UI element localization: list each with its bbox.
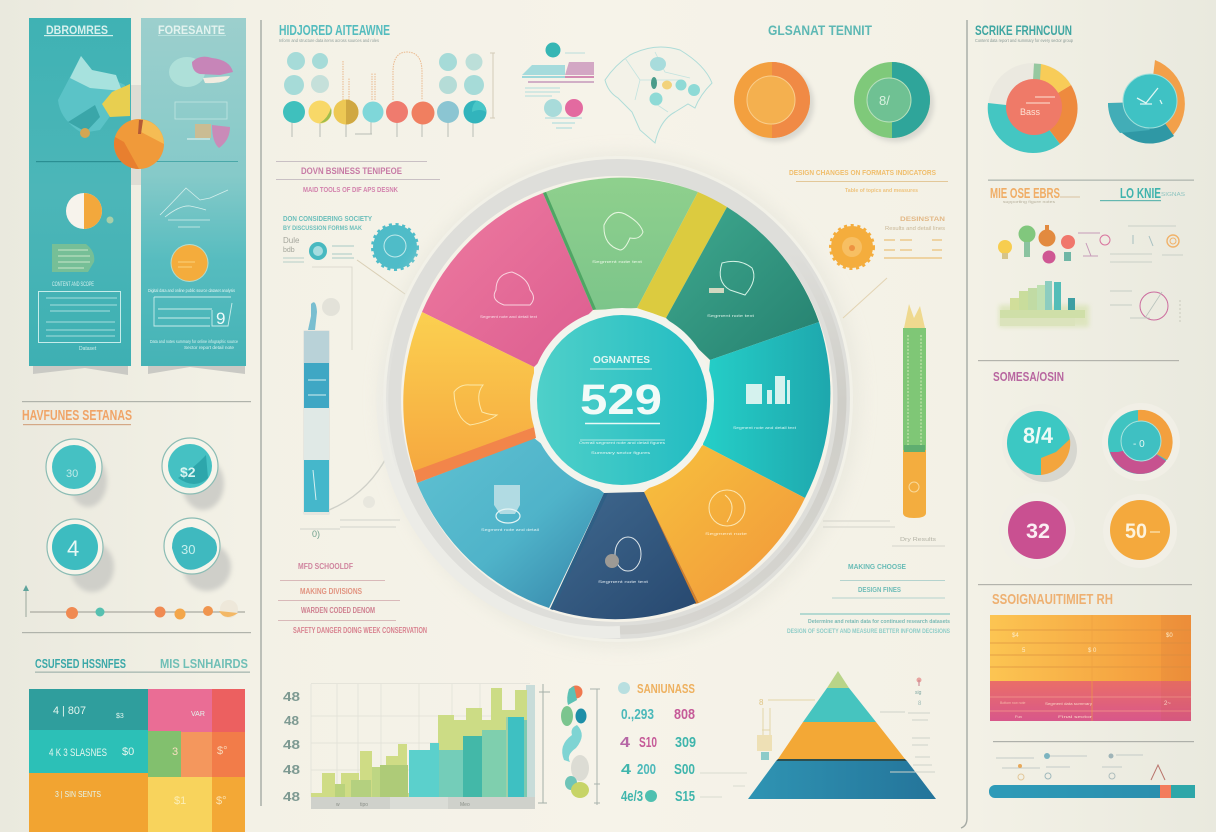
wheel: yellow segment xyxy=(403,312,536,483)
stat circle 3 xyxy=(47,519,114,592)
row 3 xyxy=(621,761,695,778)
section: top circle grid xyxy=(279,22,495,137)
stat circle 4: 30 xyxy=(181,542,195,557)
heading left: CSUFSED HSSNFES xyxy=(35,656,126,671)
cell labels xyxy=(49,705,228,807)
metric circle 2 xyxy=(1102,403,1180,481)
metric circle 3: 32 xyxy=(1026,520,1050,543)
row 4: 4e/3 xyxy=(621,788,643,805)
caption: Digital data and online public source dataset analysis xyxy=(148,288,235,294)
icon: header dot xyxy=(618,682,630,694)
pink heart shape xyxy=(187,124,230,148)
donut chart 1 xyxy=(988,63,1078,153)
heading: HAVFUNES SETANAS xyxy=(22,407,132,424)
cell labels: $0 xyxy=(122,746,134,758)
teal bars xyxy=(409,750,439,797)
y axis labels: 48 xyxy=(283,789,300,804)
metric circle 1: 8/4 xyxy=(1023,423,1054,448)
panel: left teal poster xyxy=(29,18,131,375)
chart: bar chart: tipo xyxy=(360,802,368,808)
bottom-right notes xyxy=(787,564,950,635)
segment icon xyxy=(720,261,754,295)
left annotation xyxy=(757,698,815,760)
panel: right wheel annotations: Results and detail lines xyxy=(885,226,946,232)
segment caption: Segment note and detail text xyxy=(733,425,797,430)
green circle xyxy=(854,62,934,142)
cell labels: VAR xyxy=(191,711,205,718)
heading right: MIS LSNHAIRDS xyxy=(160,656,248,671)
row 2 xyxy=(620,734,696,751)
segment caption: Segment note text xyxy=(598,579,649,584)
line chart xyxy=(160,188,228,227)
icon: world map xyxy=(605,47,712,143)
bottom-right notes: DESIGN FINES xyxy=(858,587,901,594)
row 1: 808 xyxy=(674,706,695,723)
chart: pencil gauge xyxy=(903,304,926,518)
timeline xyxy=(23,585,245,620)
bottom-left notes: SAFETY DANGER DOING WEEK CONSERVATION xyxy=(293,626,427,635)
segment caption: Segment note and detail xyxy=(481,527,539,532)
wheel: green segment xyxy=(543,178,698,310)
orange circle xyxy=(734,62,814,142)
orange headline: DESIGN CHANGES ON FORMATS INDICATORS xyxy=(789,170,936,177)
outlined text box xyxy=(175,102,227,119)
y axis labels: 48 xyxy=(284,713,299,728)
notes below wheel right xyxy=(823,521,895,527)
cell labels: 3 | SIN SENTS xyxy=(55,790,101,799)
icon: orange gear xyxy=(831,226,873,268)
segment icon xyxy=(604,212,643,250)
row notes xyxy=(1000,633,1173,719)
chart: vertical pillar gauge xyxy=(300,298,400,539)
row 2: 4 xyxy=(620,734,631,751)
row 1: 0.,293 xyxy=(621,706,654,723)
wheel outer ring xyxy=(380,152,860,648)
section: progress bar xyxy=(989,741,1195,798)
green note block xyxy=(52,244,94,272)
heading: HIDJORED AITEAWNE xyxy=(279,22,390,39)
column dividers xyxy=(261,20,967,828)
panel: left wheel annotations: bdb xyxy=(283,247,295,254)
panel: left wheel annotations: Dule xyxy=(283,236,300,245)
bulb icons xyxy=(998,225,1075,264)
subheading: Content data report and summary for every sector group xyxy=(975,38,1073,43)
centre value: 529 xyxy=(580,376,662,424)
segment caption: Segment note xyxy=(705,531,748,536)
heading: SOMESA/OSIN xyxy=(993,369,1064,384)
y axis labels: 48 xyxy=(283,689,300,704)
centre label: OGNANTES xyxy=(593,355,650,366)
grid xyxy=(311,684,530,797)
segment icon xyxy=(454,385,497,425)
faceted globe illustration xyxy=(58,56,130,138)
metric circle 3 xyxy=(999,493,1075,569)
note caption: CONTENT AND SCOPE xyxy=(52,282,94,288)
chart: bar chart: Meo xyxy=(460,802,470,808)
panel: right wheel annotations xyxy=(789,170,948,546)
stat circle 2: $2 xyxy=(180,464,196,480)
orange heading: MIE OSE EBRS xyxy=(990,185,1060,202)
row notes: Bottom row note xyxy=(1000,701,1026,705)
row 2: S10 xyxy=(639,734,657,751)
wheel centre: Summary sector figures xyxy=(591,450,650,455)
chart: vertical pillar gauge: 0) xyxy=(312,529,320,539)
bottom-right notes: Determine and retain data for continued research datasets xyxy=(808,619,950,625)
small teal circle xyxy=(309,242,327,260)
chart: bar chart xyxy=(283,684,535,809)
cell labels: $° xyxy=(217,745,228,757)
bottom-right notes: DESIGN OF SOCIETY AND MEASURE BETTER INFORM DECISIONS xyxy=(787,629,950,635)
stat circle 3: 4 xyxy=(67,536,79,561)
section: bulbs and bars: SIGNAS xyxy=(1161,192,1186,198)
brain illustration xyxy=(169,57,233,87)
metric circle 1 xyxy=(1002,404,1082,484)
segment caption: Segment note text xyxy=(592,259,643,264)
row 4 xyxy=(621,788,695,805)
wheel: teal segment xyxy=(703,322,830,498)
donut chart 1: Bass xyxy=(1020,107,1041,117)
wheel: pink segment xyxy=(422,193,593,367)
small curl icons xyxy=(1078,226,1183,262)
segment icon: buildings xyxy=(746,376,790,404)
segment caption: Segment note text xyxy=(707,313,755,318)
cell labels: 4 K 3 SLASNES xyxy=(49,747,107,759)
panel: right wheel annotations: Dry Results xyxy=(900,537,936,543)
wheel: navy segment xyxy=(551,492,696,619)
poster footer: Dataset xyxy=(79,346,97,352)
orange coin xyxy=(170,244,208,282)
stat circle 1: 30 xyxy=(66,468,78,480)
wheel: orange segment xyxy=(640,445,805,604)
row notes: $0 xyxy=(1166,633,1173,639)
metric circle 4 xyxy=(1103,494,1177,568)
stat circle 2 xyxy=(162,438,224,510)
top rows xyxy=(284,52,484,95)
segment icon xyxy=(494,485,520,514)
stat circle 4 xyxy=(164,518,231,591)
right annotations: 8 xyxy=(918,701,922,707)
row notes: Final sector xyxy=(1058,714,1093,719)
circular diagram xyxy=(1110,291,1180,322)
y axis labels: 48 xyxy=(283,737,300,752)
cell labels: 3 xyxy=(172,746,178,758)
bar chart with shadow base xyxy=(999,281,1089,327)
donut chart 2 xyxy=(1108,60,1185,144)
cell labels: $1 xyxy=(174,795,186,807)
pins xyxy=(292,120,473,137)
section: treemap xyxy=(29,656,250,832)
wheel: yellow stripe xyxy=(637,192,727,318)
section: bulbs and bars xyxy=(988,180,1194,327)
panel: left wheel annotations: BY DISCUSSION FORMS MAK xyxy=(283,225,362,232)
chart: curved column xyxy=(538,684,600,805)
segment icon xyxy=(494,272,534,305)
row 1 xyxy=(621,706,695,723)
metric circle 4: 50 xyxy=(1125,520,1147,543)
teal heading: LO KNIE xyxy=(1120,185,1161,202)
section: four metric circles xyxy=(978,360,1180,569)
bottom-left notes: WARDEN CODED DENOM xyxy=(301,606,375,615)
panel: right teal poster: Sector report detail note xyxy=(184,345,235,350)
icon: orange pie overlapping posters xyxy=(114,85,164,185)
dotted stems xyxy=(343,52,422,100)
outlined figure box xyxy=(154,297,232,326)
row notes: $ 0 xyxy=(1088,648,1097,654)
bottom-right notes: MAKING CHOOSE xyxy=(848,564,906,571)
right annotations: sig xyxy=(915,690,922,696)
section: stacked rows table xyxy=(978,584,1192,721)
row notes: $4 xyxy=(1012,633,1019,639)
row 3: 4 xyxy=(621,761,632,778)
row notes: 5 xyxy=(1022,648,1026,654)
cell labels: $° xyxy=(216,795,227,807)
legend xyxy=(996,753,1165,780)
green circle: 8/ xyxy=(879,93,890,108)
olive bars xyxy=(311,744,410,797)
subheading: Inform and structure data items across sources and roles xyxy=(279,38,380,43)
icon: teal gear xyxy=(373,225,417,269)
pink heading: DOVN BSINESS TENIPEOE xyxy=(301,166,402,177)
segment caption: Segment note and detail text xyxy=(480,314,538,319)
orange subheading: Table of topics and measures xyxy=(845,188,918,194)
gear notes: DESINSTAN xyxy=(900,216,945,223)
poster heading: DBROMRES xyxy=(46,23,108,37)
half white pie xyxy=(66,193,114,229)
left annotation: 8 xyxy=(759,698,764,707)
table: figures xyxy=(618,681,747,805)
stat circle 1 xyxy=(46,439,107,507)
footer lines: Data and notes summary for online infographic source xyxy=(150,339,238,344)
wheel: dark green segment xyxy=(666,207,819,360)
y axis labels: 48 xyxy=(283,762,300,777)
cell labels: $3 xyxy=(116,713,124,720)
tall lime bars xyxy=(438,688,527,755)
section: bulbs and bars: supporting figure notes xyxy=(1003,200,1055,204)
pink subheading: MAID TOOLS OF DIF APS DESNK xyxy=(303,185,398,194)
x axis marks: w xyxy=(336,802,340,808)
row 2: 309 xyxy=(675,734,696,751)
bottom-left notes: MFD SCHOOLDF xyxy=(298,562,353,571)
bottom-left notes: MAKING DIVISIONS xyxy=(300,587,363,596)
main row xyxy=(283,101,305,123)
y axis labels xyxy=(283,689,300,804)
icon: stacked books graphic xyxy=(522,42,594,128)
teal notes: DON CONSIDERING SOCIETY xyxy=(283,214,372,223)
segment icon xyxy=(615,537,641,571)
wheel centre xyxy=(530,308,714,492)
row notes: Fun xyxy=(1015,714,1022,719)
row 4: S15 xyxy=(675,788,695,805)
section: circle statistics xyxy=(22,401,251,592)
heading: SCRIKE FRHNCUUN xyxy=(975,22,1072,38)
chart: pyramid xyxy=(748,671,936,799)
poster heading: FORESANTE xyxy=(158,23,225,37)
row notes: Segment data summary xyxy=(1045,701,1092,706)
centre notes: Overall segment note and detail figures xyxy=(579,440,665,445)
cell labels: 4 | 807 xyxy=(53,705,86,717)
right annotations xyxy=(880,678,935,772)
row 3: S00 xyxy=(674,761,695,778)
heading: SSOIGNAUITIMIET RH xyxy=(992,591,1113,608)
bottom-left notes xyxy=(278,562,427,635)
metric circle 2: - 0 xyxy=(1133,439,1145,450)
wheel: blue segment xyxy=(417,438,608,610)
row notes: 2~ xyxy=(1164,701,1171,707)
header: SANIUNASS xyxy=(637,681,695,696)
section: right top donuts xyxy=(975,22,1185,153)
row 3: 200 xyxy=(637,761,656,778)
segment icon xyxy=(709,490,745,526)
heading: GLSANAT TENNIT xyxy=(768,22,872,38)
figure value: 9 xyxy=(216,309,225,328)
outlined note box xyxy=(38,292,120,342)
section: top centre-right circles xyxy=(734,22,934,142)
panel: right teal poster xyxy=(141,18,246,374)
panel: left wheel annotations xyxy=(276,162,440,350)
base band xyxy=(311,797,535,809)
